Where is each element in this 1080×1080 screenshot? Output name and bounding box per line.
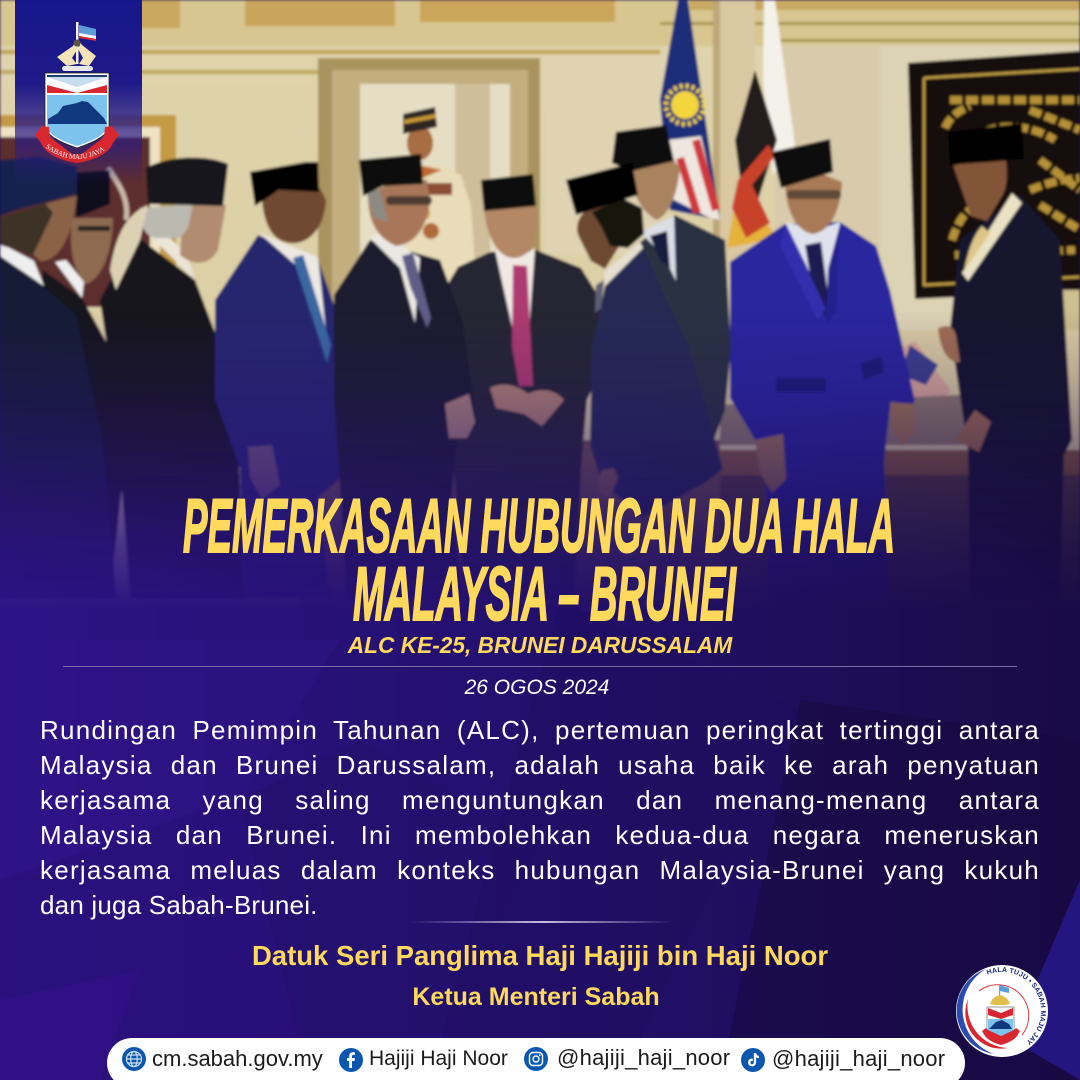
icon: instagram xyxy=(524,1047,548,1071)
calligraphy frame xyxy=(908,51,1080,299)
body paragraph: Malaysia dan Brunei. Ini membolehkan kedua-dua negara meneruskan xyxy=(40,820,1040,850)
emblem panel: Sabah coat of arms on blue band xyxy=(15,0,142,182)
person purple suit xyxy=(730,139,916,603)
person far right xyxy=(938,123,1072,600)
subtitle: ALC KE-25, BRUNEI DARUSSALAM xyxy=(348,632,732,658)
icon: facebook xyxy=(339,1048,363,1072)
column xyxy=(713,0,755,280)
body paragraph: Malaysia dan Brunei Darussalam, adalah usaha baik ke arah penyatuan xyxy=(40,750,1040,780)
person dark suit with glasses xyxy=(334,154,476,600)
person navy, seen from behind xyxy=(566,163,723,517)
wall and ceiling xyxy=(0,0,1080,620)
footer contact bar xyxy=(107,1038,965,1080)
body paragraph xyxy=(40,715,1040,920)
title xyxy=(183,484,895,637)
icon: globe xyxy=(122,1047,146,1071)
person behind, grey-navy suit xyxy=(612,125,731,450)
website: cm.sabah.gov.my xyxy=(152,1046,323,1071)
person blue suit xyxy=(215,162,350,598)
TikTok handle: @hajiji_haji_noor xyxy=(772,1046,945,1071)
date: 26 OGOS 2024 xyxy=(465,676,609,699)
lower purple field with faceted shapes, fading over the photo xyxy=(0,324,1080,1080)
body paragraph: dan juga Sabah-Brunei. xyxy=(40,890,318,920)
Facebook name: Hajiji Haji Noor xyxy=(369,1047,508,1070)
person center with pink tie xyxy=(443,174,601,600)
speaker role: Ketua Menteri Sabah xyxy=(412,983,660,1011)
ornamental divider xyxy=(410,921,675,923)
body paragraph: kerjasama meluas dalam konteks hubungan Malaysia-Brunei yang kukuh xyxy=(40,855,1040,885)
person grey hair, dark suit xyxy=(100,158,245,600)
speaker name: Datuk Seri Panglima Haji Hajiji bin Haji Noor xyxy=(252,940,828,971)
portrait frame xyxy=(318,58,540,358)
icon: tiktok xyxy=(741,1048,765,1072)
person second from left xyxy=(35,170,130,600)
emblem panel: Sabah coat of arms on blue band: SABAH MAJU JAYA xyxy=(46,144,105,159)
Instagram handle: @hajiji_haji_noor xyxy=(557,1045,730,1070)
person far left xyxy=(0,156,117,600)
Malaysia flag xyxy=(660,0,720,220)
body paragraph: Rundingan Pemimpin Tahunan (ALC), pertemuan peringkat tertinggi antara xyxy=(40,715,1040,745)
Brunei flag xyxy=(763,0,795,175)
divider line xyxy=(63,666,1017,667)
left framed painting xyxy=(0,115,176,305)
body paragraph: kerjasama yang saling menguntungkan dan menang-menang antara xyxy=(40,785,1040,815)
sideboard, cloth and small flag xyxy=(720,330,1080,460)
